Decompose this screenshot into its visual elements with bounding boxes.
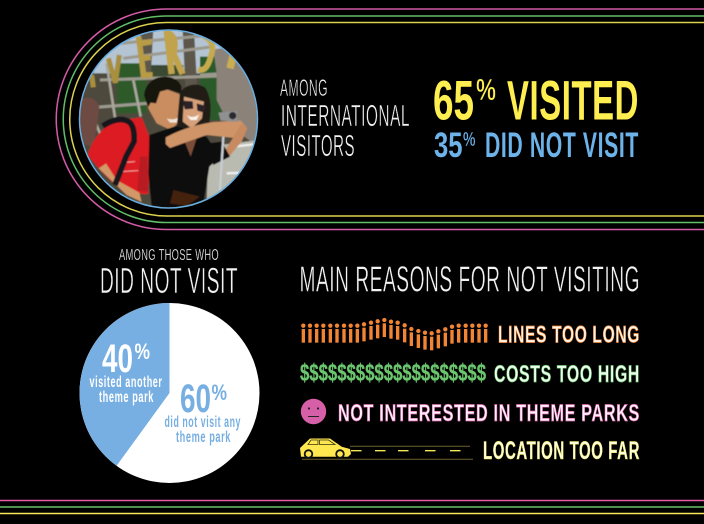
label: 40% visited another theme park	[90, 337, 162, 406]
stat: 35% did not visit	[434, 126, 639, 165]
stat: 65% visited	[433, 68, 639, 132]
stat: 35% did not visit: %	[463, 129, 476, 151]
label: 60% did not visit any theme park	[164, 377, 241, 446]
pie slice: 40%	[80, 303, 170, 466]
label: 60% did not visit any theme park: 60	[180, 377, 211, 421]
scaffold	[140, 32, 197, 87]
label: 40% visited another theme park: theme park	[99, 389, 154, 406]
pie chart	[80, 303, 260, 483]
man: face and hair	[147, 89, 182, 130]
label: 60% did not visit any theme park: %	[212, 380, 227, 405]
man: arm	[99, 163, 142, 202]
woman: arms	[166, 121, 247, 148]
heading: among those who did not visit: AMONG THOSE WHO	[119, 247, 219, 264]
icon: car on road	[300, 438, 473, 459]
stat: 65% visited: %	[476, 72, 496, 107]
icon: row of dollar signs: $$$$$$$$$$$$$$$$$$$$	[300, 360, 486, 386]
camera	[218, 111, 237, 122]
photo: couple taking a selfie	[77, 27, 263, 213]
heading: among those who did not visit	[100, 247, 238, 301]
man: backpack strap	[103, 120, 134, 185]
sky	[93, 30, 222, 74]
woman: sunglasses	[182, 101, 206, 113]
man: shirt	[87, 117, 151, 194]
foliage	[117, 63, 147, 113]
silver sculpture	[213, 48, 257, 142]
woman: hair	[177, 85, 211, 132]
lanyard	[220, 137, 223, 190]
heading: among international visitors: AMONG	[280, 75, 328, 102]
stat: 35% did not visit: 35	[434, 126, 462, 165]
label: 40% visited another theme park: visited another	[90, 374, 162, 391]
label: 40% visited another theme park: 40	[102, 337, 133, 381]
heading: among international visitors	[280, 75, 410, 163]
top track lines	[56, 9, 704, 230]
stat: 65% visited: 65	[433, 68, 474, 132]
heading: among those who did not visit: DID NOT VISIT	[100, 260, 238, 301]
icon: neutral face	[301, 399, 326, 424]
label: 60% did not visit any theme park: theme park	[176, 429, 231, 446]
icon: queue of people	[301, 318, 488, 350]
woman: shirt	[148, 126, 220, 209]
label: 60% did not visit any theme park: did not visit any	[164, 414, 241, 431]
text: INTERNATIONAL	[281, 98, 410, 133]
woman: face	[183, 97, 204, 128]
lower right building	[206, 140, 254, 199]
label: 40% visited another theme park: %	[134, 339, 150, 364]
bottom track lines	[0, 500, 704, 514]
photo ring	[80, 30, 258, 208]
gold letters	[92, 55, 119, 87]
heading: among international visitors: VISITORS	[281, 128, 355, 163]
